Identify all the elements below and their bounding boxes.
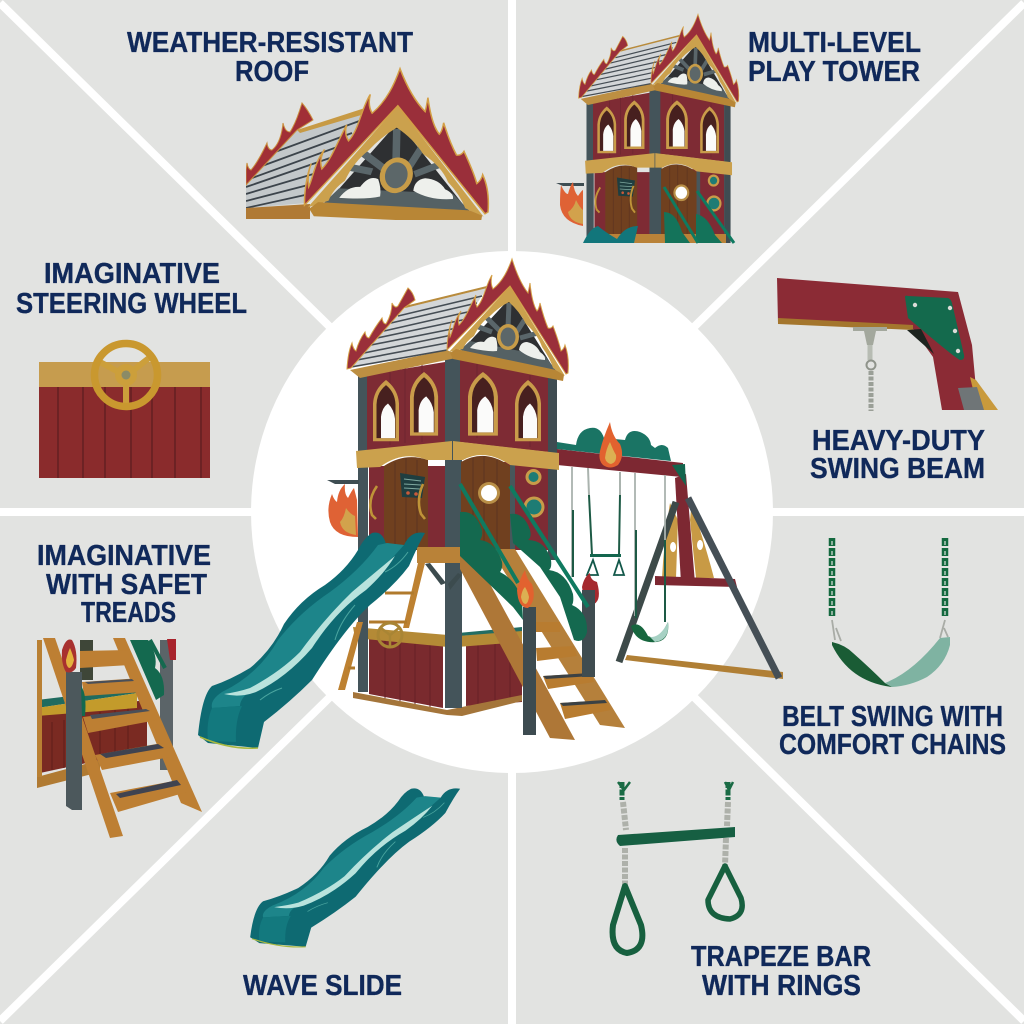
porthole and round windows: [478, 469, 544, 518]
side flame: [327, 480, 359, 537]
roof close-up: [246, 66, 490, 220]
heading: multi-level play tower: [748, 27, 921, 88]
heading: weather-resistant roof: ROOF: [235, 56, 309, 88]
heading: belt swing with comfort chains: [779, 701, 1006, 761]
steering wheel close-up: [39, 344, 210, 478]
heading: imaginative steering wheel: STEERING WHEEL: [16, 288, 247, 320]
heading: imaginative with safet treads: TREADS: [81, 597, 176, 629]
heading: trapeze bar with rings: TRAPEZE BAR: [691, 941, 871, 973]
heading: imaginative steering wheel: [16, 258, 247, 320]
tower: [347, 259, 568, 560]
heading: multi-level play tower: PLAY TOWER: [748, 56, 920, 88]
roof: [350, 287, 487, 368]
swing beam close-up: [777, 278, 998, 411]
stairs: [460, 484, 625, 740]
heading: imaginative steering wheel: IMAGINATIVE: [44, 258, 220, 290]
heading: wave slide: WAVE SLIDE: [243, 970, 402, 1002]
windows: [373, 372, 541, 441]
heading: heavy-duty swing beam: [810, 425, 985, 485]
wave slide: [198, 532, 425, 748]
fascia: [350, 350, 560, 379]
heading: imaginative with safet treads: [37, 540, 211, 629]
lower deck and play area: [338, 545, 522, 716]
mini play tower close-up: [556, 14, 739, 244]
heading: multi-level play tower: MULTI-LEVEL: [748, 27, 921, 59]
roof left flame edge: [347, 288, 415, 369]
belt swing close-up: [832, 538, 950, 687]
heading: heavy-duty swing beam: SWING BEAM: [810, 453, 985, 485]
trapeze bar and rings close-up: [613, 782, 742, 953]
central playset illustration: [198, 259, 783, 748]
wave slide close-up: [250, 788, 460, 947]
stair treads close-up: [37, 638, 202, 838]
chalkboard sign: [400, 473, 425, 498]
heading: imaginative with safet treads: WITH SAFET: [46, 569, 208, 601]
heading: weather-resistant roof: [127, 27, 414, 88]
heading: weather-resistant roof: WEATHER-RESISTANT: [127, 27, 414, 59]
swing frame: [557, 422, 783, 679]
door handles: [370, 484, 425, 519]
heading: imaginative with safet treads: IMAGINATIVE: [37, 540, 211, 572]
heading: heavy-duty swing beam: HEAVY-DUTY: [812, 425, 985, 457]
gold band: [356, 441, 559, 470]
tower walls: [358, 357, 557, 560]
gable: [447, 259, 568, 381]
heading: trapeze bar with rings: [691, 941, 871, 1002]
heading: trapeze bar with rings: WITH RINGS: [702, 970, 861, 1002]
